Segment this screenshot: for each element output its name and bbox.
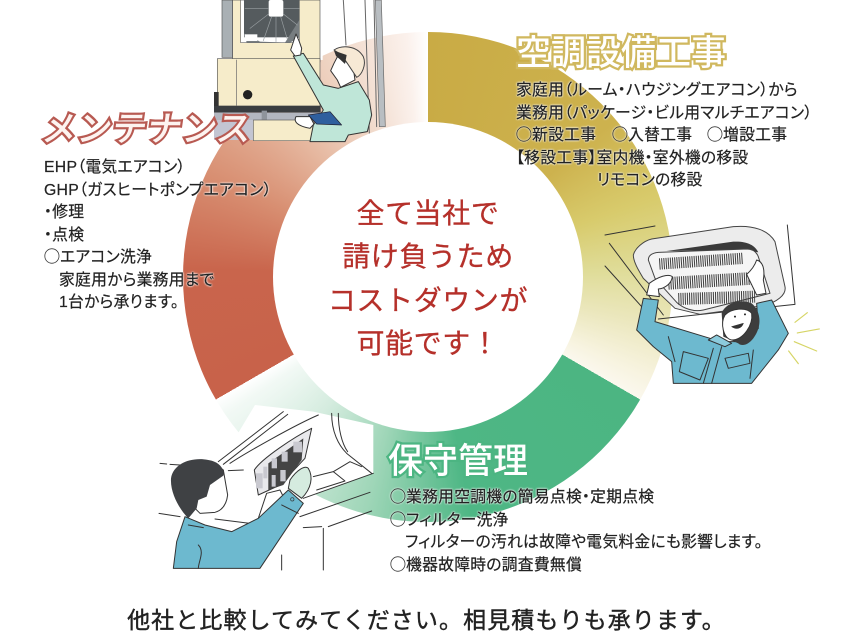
text block: maintenance: ・点検 [44,226,84,244]
heading: air-conditioning installation: 空調設備工事 [516,34,726,73]
illustration: technician inspecting outdoor unit [214,0,385,142]
text block: air-conditioning installation: ◯増設工事 [707,127,787,144]
text block: servicing and management: ◯フィルター洗浄 [390,512,509,528]
text block: air-conditioning installation: ◯新設工事 [516,127,596,144]
center message: 全て当社で [356,198,500,229]
text block: air-conditioning installation: 家庭用（ルーム・ハウジングエアコン）から [516,82,798,99]
illustration: technician cleaning filter [159,405,373,570]
center message: コストダウンが [328,285,528,316]
text block: maintenance: GHP（ガスヒートポンプエアコン） [44,182,272,198]
text block: maintenance: ・修理 [44,204,84,221]
text block: maintenance: EHP（電気エアコン） [44,159,186,176]
text block: servicing and management: フィルターの汚れは故障や電気料金にも影響します。 [405,534,763,551]
center message: 可能です！ [356,328,500,359]
text block: air-conditioning installation: リモコンの移設 [597,172,703,189]
text block: servicing and management: ◯機器故障時の調査費無償 [390,556,582,574]
illustration: technician removing ceiling cassette panel [605,225,819,383]
text block: air-conditioning installation [514,80,812,189]
ring diagram [183,32,673,522]
text block: maintenance: 1台から承ります。 [59,294,179,311]
text block: air-conditioning installation: ◯入替工事 [612,127,692,144]
heading: servicing and management: 保守管理 [388,442,528,481]
text block: servicing and management [389,487,763,574]
footer message: 他社と比較してみてください。相見積もりも承ります。 [127,607,726,633]
text block: air-conditioning installation: 【移設工事】室内機・室外機の移設 [516,150,748,166]
center circle [273,122,583,432]
text block: air-conditioning installation: 業務用（パッケージ・ビル用マルチエアコン） [516,104,812,122]
text block: servicing and management: ◯業務用空調機の簡易点検・定期点検 [390,489,654,506]
text block: maintenance: ◯エアコン洗浄 [44,249,152,266]
center message: 請け負うため [342,241,514,272]
man body [293,53,372,142]
center message [328,198,528,359]
heading: maintenance: メンテナンス [39,110,254,149]
text block: maintenance: 家庭用から業務用まで [59,272,214,288]
text block: maintenance [44,158,272,311]
